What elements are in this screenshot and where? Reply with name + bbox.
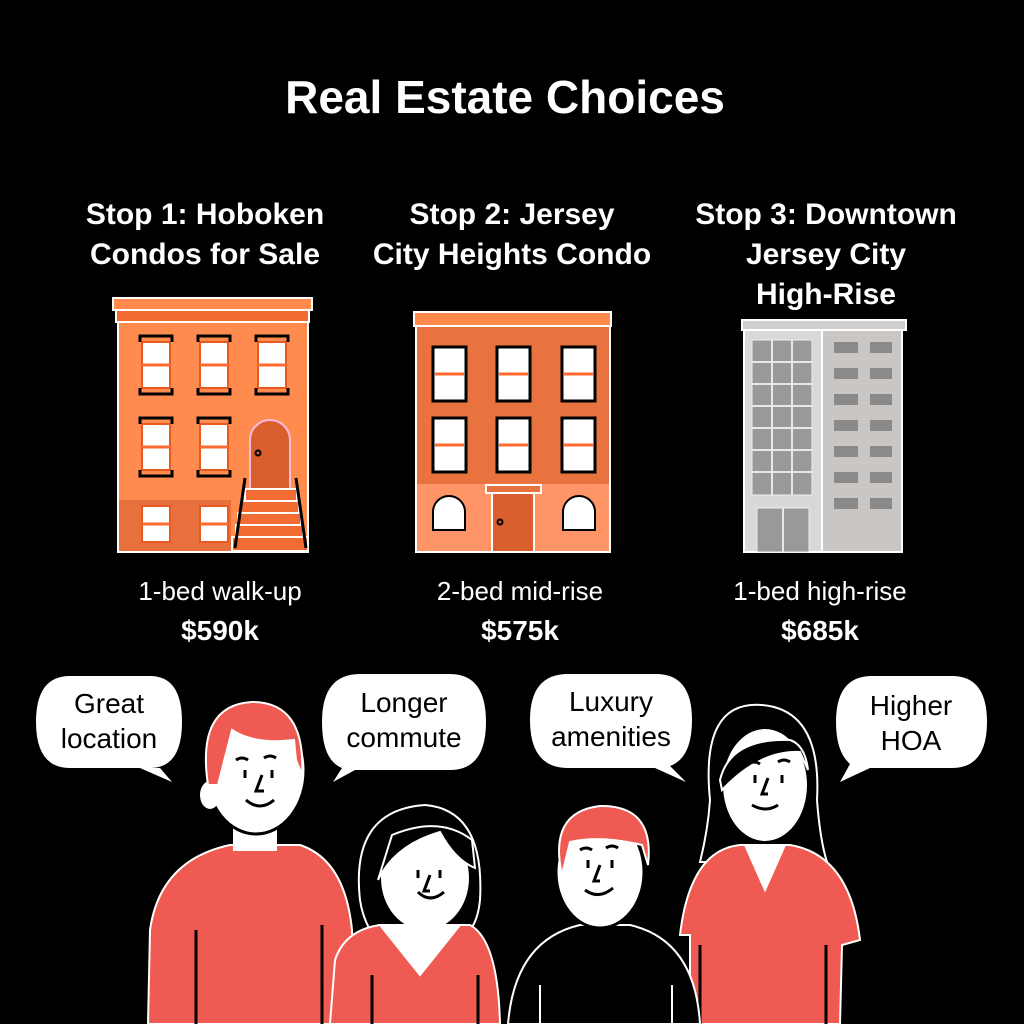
heading: stop 1 xyxy=(86,198,324,271)
person 4 xyxy=(680,705,860,1024)
icon: building 3 xyxy=(742,320,906,552)
label: unit 2 xyxy=(437,576,603,646)
callout: higher hoa: HOA xyxy=(881,725,942,756)
label: unit 2: 2-bed mid-rise xyxy=(437,576,603,606)
heading: stop 3: High-Rise xyxy=(756,278,896,311)
person 3 xyxy=(508,806,700,1024)
label: unit 1 xyxy=(138,576,302,646)
label: unit 1: $590k xyxy=(181,615,259,646)
callout: great location: Great xyxy=(74,688,144,719)
callout: great location xyxy=(36,676,182,782)
label: unit 3: $685k xyxy=(781,615,859,646)
callout: higher hoa: Higher xyxy=(870,690,952,721)
person 1 xyxy=(148,702,354,1024)
heading: stop 3: Jersey City xyxy=(746,238,906,271)
person 2 xyxy=(330,805,500,1024)
title: Real Estate Choices xyxy=(285,71,725,123)
icon: building 1 xyxy=(113,298,312,552)
callout: longer commute: commute xyxy=(346,722,462,753)
callout: luxury amenities: Luxury xyxy=(569,686,653,717)
callout: higher hoa xyxy=(836,676,987,782)
callout: great location: location xyxy=(61,723,157,754)
heading: stop 1: Condos for Sale xyxy=(90,238,320,271)
heading: stop 3 xyxy=(695,198,957,311)
label: unit 3: 1-bed high-rise xyxy=(733,576,907,606)
heading: stop 3: Stop 3: Downtown xyxy=(695,198,957,231)
callout: luxury amenities xyxy=(530,674,692,782)
label: unit 3 xyxy=(733,576,907,646)
callout: longer commute: Longer xyxy=(360,687,448,718)
heading: stop 1: Stop 1: Hoboken xyxy=(86,198,324,231)
heading: stop 2 xyxy=(373,198,651,271)
callout: luxury amenities: amenities xyxy=(551,721,671,752)
callout: longer commute xyxy=(322,674,486,782)
heading: stop 2: Stop 2: Jersey xyxy=(409,198,615,231)
label: unit 1: 1-bed walk-up xyxy=(138,576,302,606)
label: unit 2: $575k xyxy=(481,615,559,646)
icon: building 2 xyxy=(414,312,611,552)
heading: stop 2: City Heights Condo xyxy=(373,238,651,271)
